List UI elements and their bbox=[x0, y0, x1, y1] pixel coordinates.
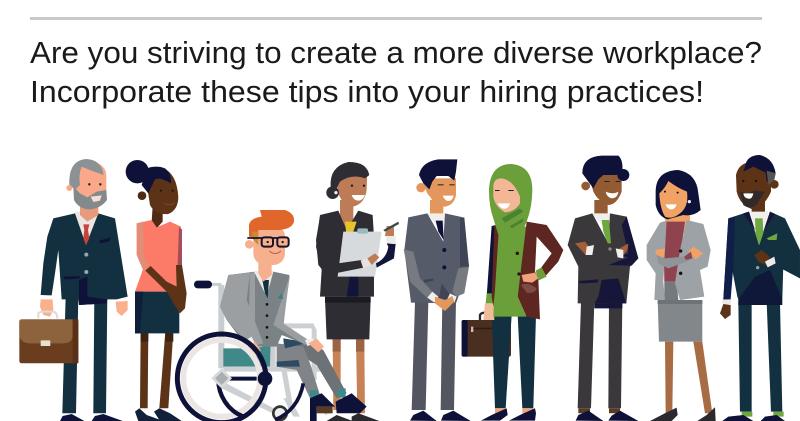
person: woman in grey blazer bbox=[647, 170, 716, 421]
person: woman in dark suit with clipboard bbox=[316, 162, 399, 413]
title bbox=[30, 35, 762, 109]
person: woman in green hijab with briefcase bbox=[462, 164, 563, 421]
title: Incorporate these tips into your hiring practices! bbox=[30, 74, 704, 109]
person: man with crossed arms in dark suit bbox=[568, 156, 638, 421]
person: woman with hair bun in coral top bbox=[126, 160, 187, 421]
title: Are you striving to create a more diverse workplace? bbox=[30, 35, 762, 70]
person: man with beard in navy suit bbox=[720, 155, 800, 421]
illustration: group of diverse employees bbox=[19, 155, 800, 421]
person: man with red hair and glasses in wheelchair bbox=[177, 210, 379, 421]
person: older man with grey beard and briefcase bbox=[19, 159, 128, 421]
person: man in grey suit bbox=[404, 159, 471, 421]
